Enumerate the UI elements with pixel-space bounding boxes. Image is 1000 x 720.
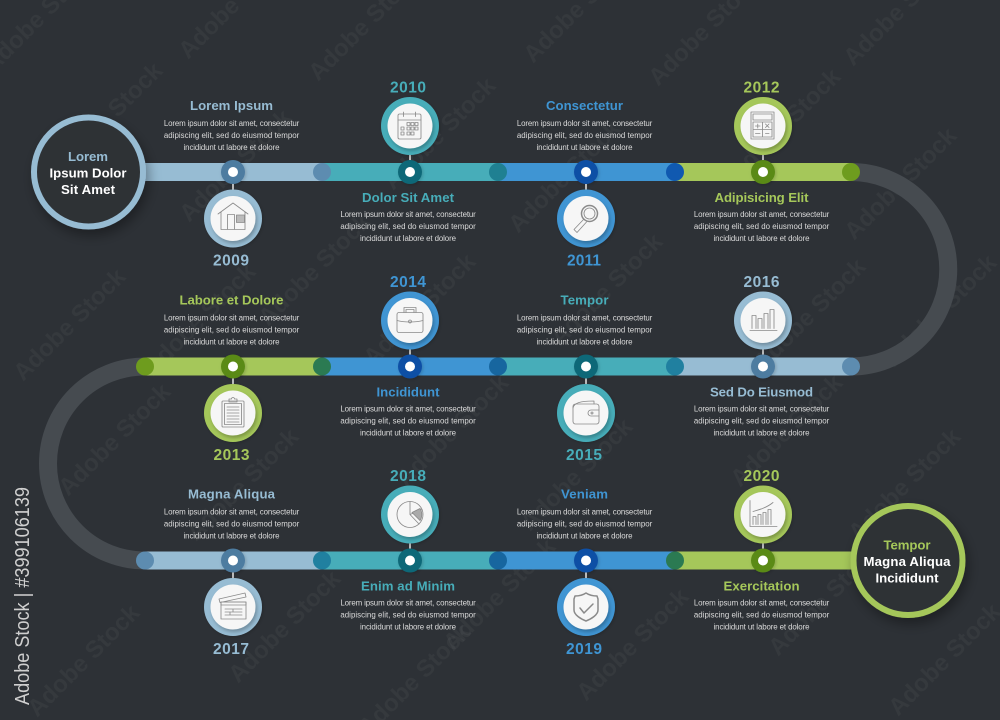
year: 2017	[213, 641, 249, 658]
start circle: Lorem	[68, 149, 108, 164]
stock watermarks: Adobe Stock	[725, 369, 849, 492]
stock watermarks: Adobe Stock	[763, 538, 887, 661]
curved connector: right	[851, 172, 948, 366]
stock watermarks: Adobe Stock	[571, 583, 695, 706]
badge	[381, 97, 439, 155]
milestone 2016	[694, 274, 830, 438]
stock watermarks: Adobe Stock	[181, 423, 305, 546]
text block: Lorem ipsum dolor sit amet, consectetur	[517, 119, 653, 128]
end circle: Tempor	[884, 538, 930, 552]
icon: shield with check	[574, 593, 598, 621]
connector	[232, 378, 234, 386]
node	[574, 160, 598, 184]
text block	[517, 314, 653, 346]
text block: incididunt ut labore et dolore	[714, 428, 810, 438]
badge	[734, 486, 792, 544]
stock watermarks: Adobe Stock	[391, 369, 515, 492]
year: 2009	[213, 252, 249, 270]
track: row 3	[136, 552, 860, 570]
text block: adipiscing elit, sed do eiusmod tempor	[694, 222, 830, 231]
text block: Lorem ipsum dolor sit amet, consectetur	[340, 404, 476, 414]
year: 2012	[744, 80, 780, 96]
year: 2013	[214, 447, 250, 464]
stock id vertical text: Adobe Stock | #399106139	[12, 487, 34, 705]
text block: Lorem ipsum dolor sit amet, consectetur	[694, 598, 830, 608]
text block: Lorem ipsum dolor sit amet, consectetur	[517, 314, 653, 322]
node	[398, 354, 422, 378]
text block: adipiscing elit, sed do eiusmod tempor	[694, 416, 830, 426]
stock watermarks: Adobe Stock	[843, 423, 967, 546]
text block: adipiscing elit, sed do eiusmod tempor	[517, 520, 653, 528]
text block	[164, 508, 300, 540]
end circle: Magna Aliqua	[864, 554, 951, 569]
milestone 2017	[164, 486, 300, 658]
badge	[557, 190, 615, 248]
connector	[409, 346, 411, 354]
milestone 2012	[694, 80, 830, 243]
icon: wallet	[573, 401, 599, 424]
stock watermarks: Adobe Stock	[253, 208, 377, 331]
node	[398, 160, 422, 184]
year: 2015	[566, 447, 602, 464]
stock watermarks: Adobe Stock	[223, 565, 347, 688]
text block: adipiscing elit, sed do eiusmod tempor	[340, 610, 476, 620]
text block: Lorem ipsum dolor sit amet, consectetur	[694, 404, 830, 414]
connector	[409, 540, 411, 548]
text block: adipiscing elit, sed do eiusmod tempor	[164, 520, 300, 528]
stock watermarks: Adobe Stock	[723, 63, 847, 186]
stock watermarks: Adobe Stock	[53, 378, 177, 501]
stock watermarks: Adobe Stock	[8, 263, 132, 386]
text block: adipiscing elit, sed do eiusmod tempor	[517, 326, 653, 334]
track: row 1	[140, 163, 860, 181]
text block: adipiscing elit, sed do eiusmod tempor	[164, 131, 300, 140]
text block: incididunt ut labore et dolore	[184, 143, 280, 152]
milestone 2010	[340, 80, 476, 243]
start circle	[34, 118, 143, 226]
text block	[517, 508, 653, 540]
icon: briefcase	[397, 308, 423, 332]
badge	[204, 384, 262, 442]
connector	[585, 378, 587, 386]
heading: Labore et Dolore	[180, 292, 284, 308]
icon: house	[218, 203, 248, 230]
text block: adipiscing elit, sed do eiusmod tempor	[164, 326, 300, 334]
text block: Lorem ipsum dolor sit amet, consectetur	[517, 508, 653, 516]
stock watermarks: Adobe Stock	[378, 72, 502, 195]
text block: incididunt ut labore et dolore	[184, 532, 280, 540]
heading: Enim ad Minim	[361, 578, 455, 594]
text block	[694, 404, 830, 438]
stock watermarks: Adobe Stock	[515, 413, 639, 536]
heading: Adipisicing Elit	[714, 190, 809, 205]
text block	[340, 598, 476, 632]
stock watermarks: Adobe Stock	[748, 253, 872, 376]
stock watermarks: Adobe Stock	[839, 122, 963, 245]
stock watermarks: Adobe Stock	[22, 599, 146, 720]
start circle: Sit Amet	[61, 182, 116, 197]
icon: clapperboard	[219, 593, 246, 619]
stock watermarks: Adobe Stock	[45, 57, 169, 180]
text block: incididunt ut labore et dolore	[360, 234, 457, 243]
text block: Lorem ipsum dolor sit amet, consectetur	[694, 210, 830, 219]
stock watermarks: Adobe Stock	[174, 104, 298, 227]
year: 2011	[567, 252, 601, 270]
icon: pie chart	[397, 502, 423, 528]
milestone 2011	[517, 98, 653, 270]
icon: bar chart	[750, 310, 777, 330]
text block: incididunt ut labore et dolore	[360, 428, 457, 438]
year: 2016	[744, 274, 780, 291]
connector	[585, 572, 587, 580]
heading: Dolor Sit Amet	[362, 190, 455, 205]
badge	[204, 190, 262, 248]
text block	[694, 598, 830, 632]
badge	[557, 578, 615, 636]
year: 2010	[390, 80, 426, 96]
node	[574, 354, 598, 378]
connector	[762, 346, 764, 354]
text block: Lorem ipsum dolor sit amet, consectetur	[340, 598, 476, 608]
start circle: Ipsum Dolor	[50, 166, 126, 180]
heading: Sed Do Eiusmod	[710, 384, 813, 400]
heading: Veniam	[561, 486, 608, 502]
track: row 2	[136, 358, 860, 376]
text block	[694, 210, 830, 243]
heading: Lorem Ipsum	[190, 98, 273, 113]
heading: Incididunt	[376, 384, 440, 400]
milestone 2009	[164, 98, 300, 270]
heading: Magna Aliqua	[188, 486, 276, 502]
text block	[340, 404, 476, 438]
node	[751, 354, 775, 378]
text block: Lorem ipsum dolor sit amet, consectetur	[164, 508, 300, 516]
text block: adipiscing elit, sed do eiusmod tempor	[340, 222, 476, 231]
text block: Lorem ipsum dolor sit amet, consectetur	[340, 210, 476, 219]
milestone 2019	[517, 486, 653, 658]
icon: calendar	[398, 112, 421, 139]
connector	[232, 572, 234, 580]
badge	[557, 384, 615, 442]
milestone 2015	[517, 292, 653, 464]
icon: clipboard	[222, 398, 244, 427]
node	[574, 548, 598, 572]
milestone 2018	[340, 468, 476, 632]
stock watermarks: Adobe Stock	[138, 258, 262, 381]
milestone 2013	[164, 292, 300, 464]
text block	[517, 119, 653, 152]
badge	[204, 578, 262, 636]
text block	[340, 210, 476, 243]
curved connector: left	[48, 366, 145, 560]
badge	[734, 97, 792, 155]
icon: magnifier	[574, 206, 598, 232]
text block: incididunt ut labore et dolore	[536, 338, 633, 346]
text block: incididunt ut labore et dolore	[536, 143, 633, 152]
milestone 2020	[694, 468, 830, 632]
connector	[762, 540, 764, 548]
stock watermarks: Adobe Stock	[503, 115, 627, 238]
text block: incididunt ut labore et dolore	[536, 532, 633, 540]
badge	[381, 292, 439, 350]
stock watermarks: Adobe Stock	[545, 228, 669, 351]
node	[221, 354, 245, 378]
stock watermarks: Adobe Stock	[358, 248, 482, 371]
node	[221, 548, 245, 572]
connector	[762, 152, 764, 160]
icon: calculator	[751, 112, 774, 139]
heading: Consectetur	[546, 98, 623, 113]
text block: adipiscing elit, sed do eiusmod tempor	[517, 131, 653, 140]
node	[221, 160, 245, 184]
heading: Exercitation	[724, 578, 800, 594]
milestone 2014	[340, 274, 476, 438]
stock watermarks: Adobe Stock	[438, 533, 562, 656]
text block: Lorem ipsum dolor sit amet, consectetur	[164, 119, 300, 128]
node	[751, 160, 775, 184]
stock watermarks: Adobe Stock	[879, 249, 1000, 372]
year: 2014	[390, 274, 426, 291]
badge	[734, 292, 792, 350]
text block	[164, 314, 300, 346]
connector	[409, 152, 411, 160]
end circle	[854, 506, 962, 615]
text block: incididunt ut labore et dolore	[360, 622, 457, 632]
icon: growth chart	[750, 500, 777, 526]
end circle: Incididunt	[876, 570, 939, 586]
year: 2020	[744, 468, 780, 485]
node	[751, 548, 775, 572]
text block: adipiscing elit, sed do eiusmod tempor	[694, 610, 830, 620]
connector	[585, 184, 587, 192]
badge	[381, 486, 439, 544]
text block: Lorem ipsum dolor sit amet, consectetur	[164, 314, 300, 322]
text block: adipiscing elit, sed do eiusmod tempor	[340, 416, 476, 426]
node	[398, 548, 422, 572]
heading: Tempor	[560, 292, 608, 308]
year: 2019	[566, 641, 602, 658]
year: 2018	[390, 468, 426, 485]
text block: incididunt ut labore et dolore	[714, 622, 810, 632]
text block: incididunt ut labore et dolore	[714, 234, 810, 243]
text block: incididunt ut labore et dolore	[184, 338, 280, 346]
text block	[164, 119, 300, 152]
connector	[232, 184, 234, 192]
